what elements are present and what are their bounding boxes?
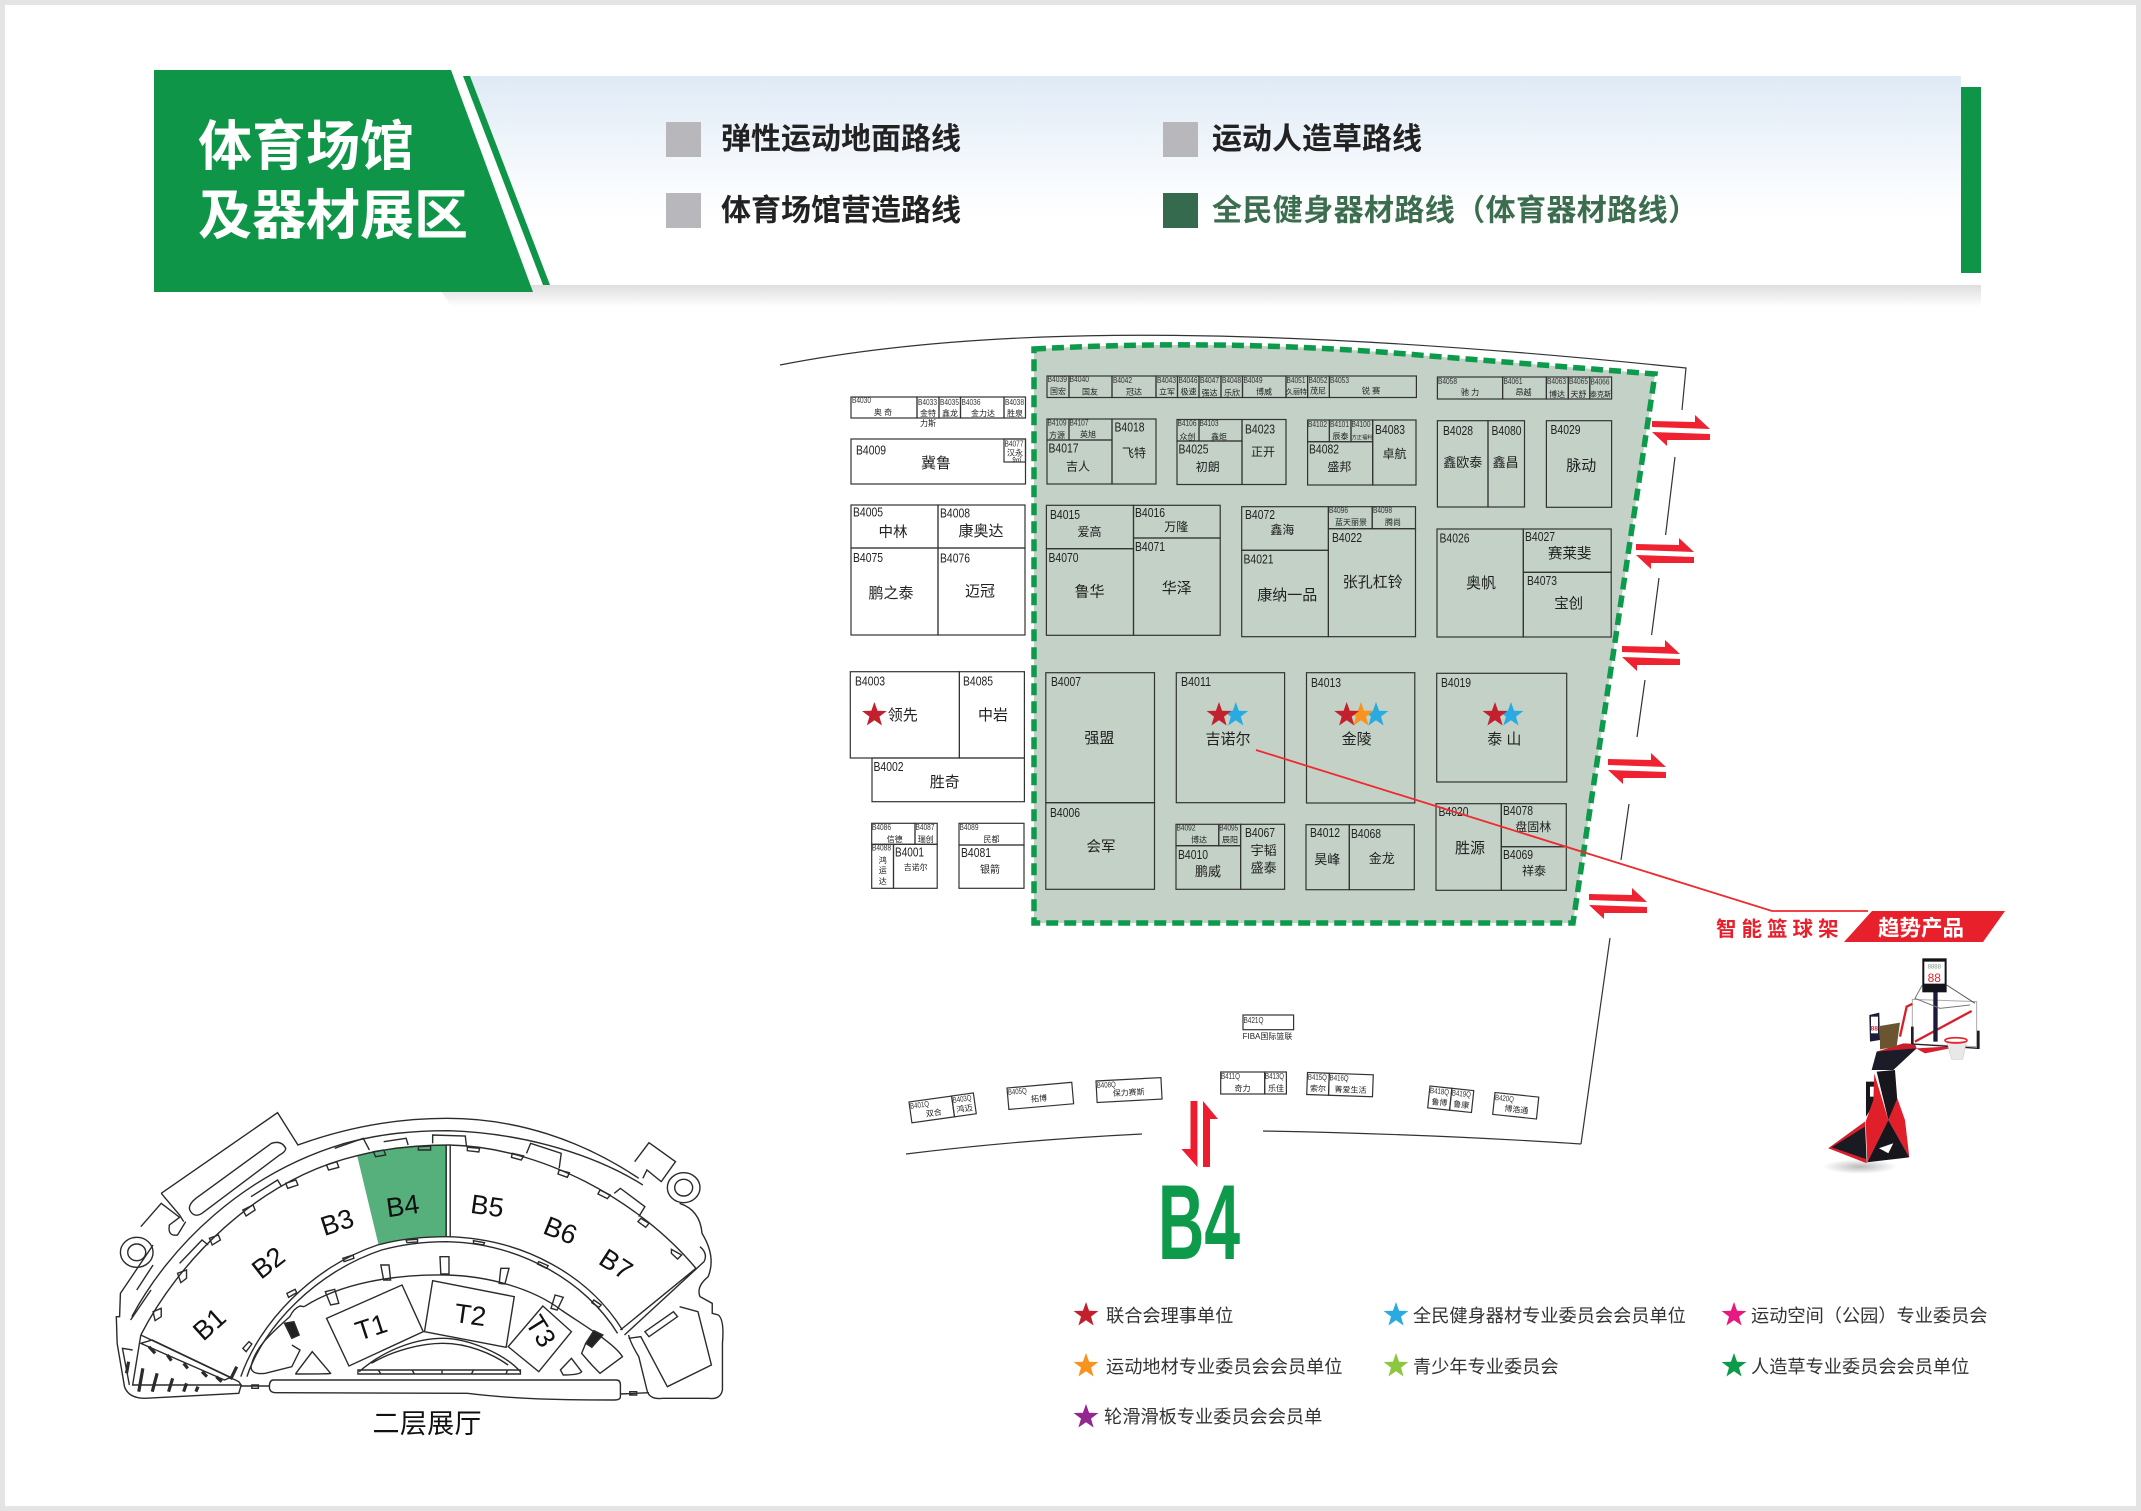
- booth block B4028: B4080: [1492, 423, 1522, 438]
- booth block B4082: 卓航: [1382, 446, 1407, 461]
- header band: [154, 70, 1981, 307]
- booth block B4010: 博达: [1191, 834, 1207, 844]
- icon: basketball stand: [1823, 958, 1978, 1174]
- booth block B4017: [1047, 418, 1156, 484]
- booth group B4001: 鸿: [879, 855, 887, 865]
- booth block B4072: B4096: [1329, 506, 1348, 515]
- booth block B4020: [1436, 803, 1566, 890]
- icon: basketball stand: 88: [1928, 971, 1941, 985]
- booth row north A: 博威: [1256, 386, 1272, 396]
- booth block B4082: 盛邦: [1327, 459, 1351, 474]
- booth row north A: B4049: [1244, 376, 1263, 385]
- key map: hall labels: [187, 1189, 638, 1353]
- booth B4007: 强盟: [1084, 730, 1114, 747]
- booth B401Q B403Q: [909, 1093, 976, 1123]
- booth B4009: 9㎡: [1012, 456, 1022, 464]
- booth B4019: 泰 山: [1487, 731, 1521, 748]
- booth row north B: 泰克斯: [1590, 390, 1611, 398]
- legend item: 运动空间（公园）专业委员会: 运动空间（公园）专业委员会: [1751, 1306, 1987, 1326]
- booth block B4026: [1437, 529, 1611, 637]
- key map: hall labels: B4: [384, 1189, 421, 1223]
- booth B408Q: 保力赛斯: [1112, 1086, 1145, 1098]
- booth block B4026: 赛莱斐: [1548, 546, 1591, 562]
- venue key map: [116, 1113, 723, 1439]
- booth block B4017: 方源: [1049, 430, 1065, 440]
- booth B411Q B413Q: 奇力: [1234, 1083, 1250, 1093]
- booth group B4081: [959, 823, 1024, 888]
- booth block B4015: B4071: [1135, 539, 1165, 554]
- booth B420Q: 博浩通: [1504, 1103, 1529, 1116]
- booth B4002: [872, 758, 1024, 802]
- booth group B4001: 瑞创: [918, 834, 934, 844]
- booth block B4072: B4022: [1332, 530, 1362, 545]
- booth B411Q B413Q: B411Q: [1221, 1072, 1240, 1081]
- booth row north B: 驰 力: [1461, 387, 1479, 397]
- booth row north A: 久丽特: [1286, 387, 1307, 396]
- booth B401Q B403Q: 双合: [925, 1107, 942, 1119]
- booth B4006: B4006: [1050, 805, 1080, 820]
- icon: basketball stand: 88: [1871, 1026, 1878, 1033]
- booth block B4028: 鑫昌: [1493, 455, 1519, 470]
- booth row west top: 胜泉: [1007, 408, 1023, 418]
- booth block B4017: B4109: [1048, 418, 1067, 428]
- booth group B4005: 鹏之泰: [868, 585, 914, 602]
- booth row north A: 立军: [1159, 386, 1175, 396]
- booth B401Q B403Q: B401Q: [909, 1099, 930, 1111]
- booth block B4020: B4020: [1438, 804, 1468, 819]
- key map: hall labels: T1: [352, 1308, 391, 1347]
- booth B4029: [1546, 421, 1612, 507]
- booth block B4025: [1177, 419, 1286, 484]
- booth B405Q: [1007, 1082, 1074, 1109]
- booth block B4020: 胜源: [1455, 840, 1485, 857]
- booth B418Q B419Q: [1428, 1086, 1474, 1112]
- booth B4013: [1306, 673, 1415, 803]
- booth row north A: 国宏: [1050, 386, 1066, 396]
- arrow: east entrance 4: [1608, 753, 1666, 784]
- booth B411Q B413Q: [1221, 1072, 1286, 1094]
- booth group B4001: 达: [879, 876, 887, 886]
- booth B4029: B4029: [1550, 422, 1580, 437]
- booth B4009: B4009: [856, 442, 886, 458]
- booth group B4001: [872, 823, 937, 888]
- title: 及器材展区: [198, 186, 468, 246]
- booth row north A: 锐 赛: [1362, 386, 1380, 396]
- booth row west top: B4030: [852, 396, 871, 405]
- booth B4019: B4019: [1441, 675, 1471, 690]
- booth B4007: [1046, 673, 1154, 803]
- booth block B4026: 宝创: [1554, 596, 1583, 612]
- booth row north B: 昂越: [1516, 387, 1532, 397]
- booth B420Q: [1493, 1092, 1539, 1119]
- route legend: 全民健身器材路线: 全民健身器材路线（体育器材路线）: [1212, 194, 1698, 228]
- booth B4013: 金陵: [1342, 731, 1372, 748]
- booth group B4005: [851, 504, 1025, 635]
- arrow: east entrance 5: [1589, 888, 1647, 919]
- booth row north A: B4046: [1178, 376, 1198, 385]
- legend item: 运动地材专业委员会会员单位: 运动地材专业委员会会员单位: [1106, 1357, 1342, 1377]
- booth B4011: [1176, 673, 1285, 803]
- booth group B4081: B4089: [960, 823, 979, 832]
- booth row west top: 金力达: [971, 408, 995, 418]
- booth block B4025: B4025: [1178, 442, 1208, 456]
- booth B415Q B416Q: B416Q: [1329, 1073, 1349, 1083]
- booth row north B: B4061: [1504, 377, 1523, 386]
- route legend: 弹性运动地面路线: 弹性运动地面路线: [721, 123, 961, 156]
- booth B401Q B403Q: B403Q: [952, 1093, 972, 1105]
- booth B418Q B419Q: B419Q: [1451, 1088, 1471, 1099]
- booth block B4028: [1437, 421, 1524, 507]
- booth group B4081: 民都: [984, 835, 1000, 844]
- booth block B4012: [1306, 825, 1414, 890]
- icon: basketball stand: 8888: [1928, 964, 1942, 970]
- booth block B4082: B4082: [1309, 442, 1339, 456]
- legend item: 青少年专业委员会: [1384, 1353, 1559, 1377]
- booth row north B: 天舒: [1570, 389, 1586, 399]
- key map: highlighted hall B4: [357, 1145, 447, 1244]
- booth block B4082: [1308, 420, 1416, 485]
- booth block B4082: 辰泰: [1332, 431, 1348, 441]
- key map: hall labels: B7: [594, 1243, 638, 1286]
- booth block B4015: 爱高: [1077, 524, 1102, 539]
- booth row west top: B4038: [1005, 398, 1024, 407]
- booth block B4010: B4010: [1178, 847, 1208, 862]
- booth group B4005: B4008: [940, 506, 970, 520]
- booth B4009: 冀鲁: [921, 455, 951, 472]
- legend: member categories: [1074, 1302, 1987, 1428]
- booth row north A: B4039: [1048, 375, 1067, 384]
- booth B421Q: B421Q: [1244, 1016, 1264, 1025]
- booth B418Q B419Q: B418Q: [1430, 1086, 1449, 1097]
- booth block B4020: B4078: [1503, 803, 1533, 818]
- booth block B4010: B4095: [1219, 824, 1239, 832]
- booth B408Q: B408Q: [1096, 1080, 1116, 1090]
- booth group B4001: 信德: [887, 834, 903, 844]
- arrow: south entrance: [1181, 1101, 1218, 1167]
- booth block B4082: 方正福利: [1352, 433, 1372, 441]
- booth block B4026: 奥帆: [1466, 575, 1496, 592]
- booth block B4072: 鑫海: [1270, 522, 1294, 537]
- booth block B4010: 宇韬: [1251, 843, 1277, 858]
- route legend: 运动人造草路线: 运动人造草路线: [1212, 123, 1422, 156]
- booth group B4001: B4088: [872, 844, 891, 852]
- booth block B4017: 飞特: [1122, 445, 1146, 460]
- booth group B4005: B4076: [940, 550, 970, 566]
- booth B408Q: [1096, 1078, 1162, 1102]
- booth row north A: B4043: [1157, 376, 1176, 385]
- B4 hall zone: [1034, 345, 1655, 923]
- booth row west top: 力斯: [920, 418, 936, 428]
- booth row north B: B4065: [1569, 377, 1588, 386]
- booth row north B: [1437, 377, 1612, 399]
- booth B405Q: B405Q: [1007, 1086, 1027, 1097]
- booth B418Q B419Q: 鲁博: [1431, 1096, 1448, 1108]
- booth block B4025: B4103: [1200, 419, 1219, 428]
- booth B405Q: 拓博: [1031, 1093, 1047, 1104]
- booth block B4012: 金龙: [1369, 851, 1395, 866]
- key map: hall labels: B3: [317, 1203, 358, 1242]
- booth row north A: 国友: [1082, 386, 1098, 396]
- legend item: 人造草专业委员会会员单位: 人造草专业委员会会员单位: [1751, 1357, 1969, 1377]
- booth block B4026: B4027: [1525, 529, 1555, 544]
- booth row north A: B4052: [1308, 376, 1328, 385]
- booth B411Q B413Q: 乐佳: [1268, 1083, 1284, 1093]
- booth block B4010: B4067: [1245, 825, 1275, 840]
- booth block B4072: B4072: [1245, 507, 1275, 522]
- booth block B4026: B4026: [1440, 530, 1470, 546]
- booth row west top: 金特: [920, 408, 936, 418]
- booth B4002: 胜奇: [930, 774, 960, 791]
- booth B421Q: [1243, 1015, 1294, 1041]
- booth block B4072: 张孔杠铃: [1343, 574, 1403, 591]
- booth block B4072: B4098: [1373, 506, 1392, 515]
- title: [198, 117, 468, 246]
- booth row north A: B4042: [1113, 376, 1132, 385]
- booth block B4025: 初朗: [1196, 460, 1220, 474]
- key map: hall labels: T3: [520, 1310, 562, 1353]
- booth group B4001: 吉诺尔: [904, 862, 928, 872]
- booth block B4017: B4017: [1048, 440, 1078, 456]
- booth row north A: 茂尼: [1310, 386, 1326, 396]
- booth row west top: 鑫龙: [942, 408, 958, 418]
- booth row north A: B4048: [1222, 376, 1241, 385]
- booth row west top: B4035: [940, 398, 959, 407]
- booth block B4012: B4068: [1351, 826, 1381, 841]
- booth B415Q B416Q: 索尔: [1310, 1083, 1326, 1094]
- booths: [850, 375, 1612, 1123]
- legend item: 联合会理事单位: [1074, 1302, 1233, 1326]
- hall outline walls: [780, 335, 1686, 1154]
- arrow: east entrance 3: [1622, 640, 1680, 671]
- booth row west top: 奥 奇: [874, 407, 892, 417]
- booth group B4001: B4087: [916, 823, 935, 832]
- booth B4029: 脉动: [1566, 458, 1596, 474]
- arrow: east entrance 2: [1636, 538, 1694, 569]
- title: 体育场馆: [198, 117, 414, 177]
- booth B411Q B413Q: B413Q: [1265, 1072, 1284, 1081]
- booth B415Q B416Q: [1307, 1072, 1373, 1097]
- booth row north A: 极速: [1180, 386, 1196, 396]
- booth B4085: 中岩: [978, 707, 1008, 724]
- booth block B4010: B4092: [1176, 824, 1196, 832]
- booth group B4081: 银箭: [980, 863, 1000, 876]
- booth block B4072: 蓝天丽景: [1335, 517, 1367, 527]
- booth group B4001: B4001: [895, 844, 924, 860]
- booth B4003: B4003: [855, 674, 885, 688]
- booth B4013: B4013: [1311, 675, 1341, 690]
- booth block B4015: 鲁华: [1074, 584, 1105, 600]
- booth block B4017: B4018: [1114, 420, 1144, 434]
- booth group B4005: 康奥达: [958, 523, 1004, 540]
- legend item: 青少年专业委员会: 青少年专业委员会: [1413, 1357, 1559, 1377]
- booth group B4081: B4081: [961, 845, 991, 860]
- booth B421Q: FIBA国际篮联: [1243, 1031, 1292, 1041]
- key map: hall labels: B2: [246, 1241, 291, 1285]
- booth row north A: B4040: [1070, 375, 1089, 384]
- booth B401Q B403Q: 鸿迈: [956, 1102, 973, 1114]
- booth row north A: B4053: [1330, 376, 1349, 385]
- booth block B4015: B4070: [1048, 550, 1078, 565]
- legend item: 联合会理事单位: 联合会理事单位: [1106, 1306, 1233, 1326]
- booth row north A: B4051: [1286, 376, 1306, 385]
- booth block B4072: 康纳一品: [1257, 587, 1317, 604]
- booth group B4005: B4075: [853, 550, 883, 565]
- key map: hall labels: T2: [453, 1298, 488, 1332]
- booth block B4020: B4069: [1503, 847, 1533, 862]
- booth row north A: [1047, 375, 1416, 398]
- booth B4009: B4077: [1004, 440, 1024, 448]
- booth group B4001: B4086: [872, 823, 891, 832]
- booth block B4010: [1176, 824, 1285, 889]
- booth block B4015: B4016: [1135, 505, 1165, 520]
- booth block B4020: 祥泰: [1522, 864, 1546, 878]
- booth row west top: [851, 396, 1026, 428]
- booth group B4005: 中林: [878, 524, 908, 541]
- booth row north B: B4063: [1547, 377, 1566, 386]
- booth block B4017: 英旭: [1080, 429, 1096, 439]
- booth B4006: [1046, 803, 1154, 889]
- booth block B4072: B4021: [1244, 552, 1274, 566]
- booth block B4072: 腾尚: [1385, 517, 1401, 527]
- booth B415Q B416Q: 菁爱生活: [1334, 1084, 1367, 1095]
- booth block B4025: B4106: [1178, 419, 1197, 428]
- booth B4003: 领先: [888, 707, 918, 724]
- booth block B4012: 昊峰: [1314, 852, 1340, 867]
- member stars in booths: [862, 702, 1523, 726]
- booth block B4017: B4107: [1070, 418, 1089, 428]
- callout: smart basketball stand: 趋势产品: [1878, 916, 1964, 940]
- booth row north A: 冠达: [1126, 386, 1142, 396]
- booth row north A: 乐欣: [1224, 388, 1240, 398]
- booth B4085: B4085: [963, 674, 993, 688]
- booth block B4026: B4073: [1527, 573, 1557, 588]
- booth B415Q B416Q: B415Q: [1308, 1073, 1327, 1082]
- booth block B4082: B4101: [1330, 420, 1349, 429]
- booth group B4005: B4005: [853, 504, 883, 520]
- booth B4006: 会军: [1086, 838, 1116, 856]
- booth block B4025: B4023: [1245, 422, 1275, 436]
- booth row north B: B4066: [1590, 378, 1610, 386]
- key map: hall labels: B5: [469, 1189, 506, 1223]
- booth B418Q B419Q: 鲁康: [1453, 1099, 1470, 1110]
- booth block B4025: 鑫炬: [1211, 432, 1227, 442]
- booth block B4082: B4100: [1352, 420, 1371, 429]
- booth block B4015: [1046, 505, 1220, 635]
- callout: smart basketball stand: [1716, 911, 2005, 942]
- booth block B4010: 辰阳: [1222, 836, 1238, 844]
- key map: building outlines: [116, 1113, 723, 1400]
- booth B4009: 汉永: [1007, 448, 1023, 458]
- booth block B4028: B4028: [1443, 423, 1473, 438]
- booth row north A: B4047: [1200, 376, 1219, 385]
- key map caption: 二层展厅: [372, 1409, 482, 1439]
- booth row north B: B4058: [1438, 377, 1457, 386]
- booth B4011: B4011: [1181, 674, 1211, 689]
- booth block B4028: 鑫欧泰: [1443, 455, 1482, 470]
- booth block B4082: B4102: [1308, 420, 1327, 429]
- booth B4002: B4002: [874, 759, 904, 774]
- booth block B4025: 众创: [1180, 432, 1196, 442]
- legend item: 全民健身器材专业委员会会员单位: 全民健身器材专业委员会会员单位: [1413, 1306, 1686, 1326]
- arrow: east entrance 1: [1652, 415, 1710, 446]
- booth block B4020: 盘固林: [1515, 819, 1551, 834]
- booth B4085: [959, 672, 1024, 758]
- booth block B4015: B4015: [1050, 507, 1080, 522]
- callout: smart basketball stand: 智能篮球架: [1716, 918, 1844, 941]
- booth B4019: [1437, 673, 1567, 782]
- hall code B4: B4: [1158, 1162, 1240, 1282]
- booth B4003: [850, 672, 959, 758]
- booth group B4001: 运: [879, 866, 887, 875]
- booth block B4072: [1242, 506, 1416, 637]
- callout leader line: [1256, 750, 1868, 911]
- booth row north A: 强达: [1202, 388, 1218, 398]
- legend item: 轮滑滑板专业委员会会员单: 轮滑滑板专业委员会会员单: [1104, 1407, 1322, 1427]
- booth row west top: B4033: [918, 398, 937, 407]
- booth B4009: [851, 439, 1026, 484]
- booth block B4015: 万隆: [1164, 519, 1188, 534]
- booth group B4005: 迈冠: [965, 583, 995, 600]
- booth B420Q: B420Q: [1495, 1093, 1514, 1104]
- booth B4007: B4007: [1051, 674, 1081, 689]
- route legend: 体育场馆营造路线: 体育场馆营造路线: [721, 194, 961, 228]
- booth row west top: B4036: [962, 398, 981, 407]
- key map: hall labels: B1: [187, 1302, 232, 1347]
- key map: hall labels: B6: [539, 1211, 581, 1251]
- booth B4011: 吉诺尔: [1205, 731, 1251, 748]
- booth block B4025: 正开: [1251, 445, 1275, 459]
- booth block B4015: 华泽: [1162, 580, 1192, 597]
- booth block B4082: B4083: [1375, 422, 1405, 437]
- booth block B4017: 吉人: [1066, 460, 1090, 474]
- booth block B4010: 盛泰: [1251, 860, 1277, 876]
- booth block B4012: B4012: [1310, 825, 1340, 840]
- booth block B4010: 鹏威: [1195, 864, 1221, 879]
- booth row north B: 博达: [1549, 389, 1565, 399]
